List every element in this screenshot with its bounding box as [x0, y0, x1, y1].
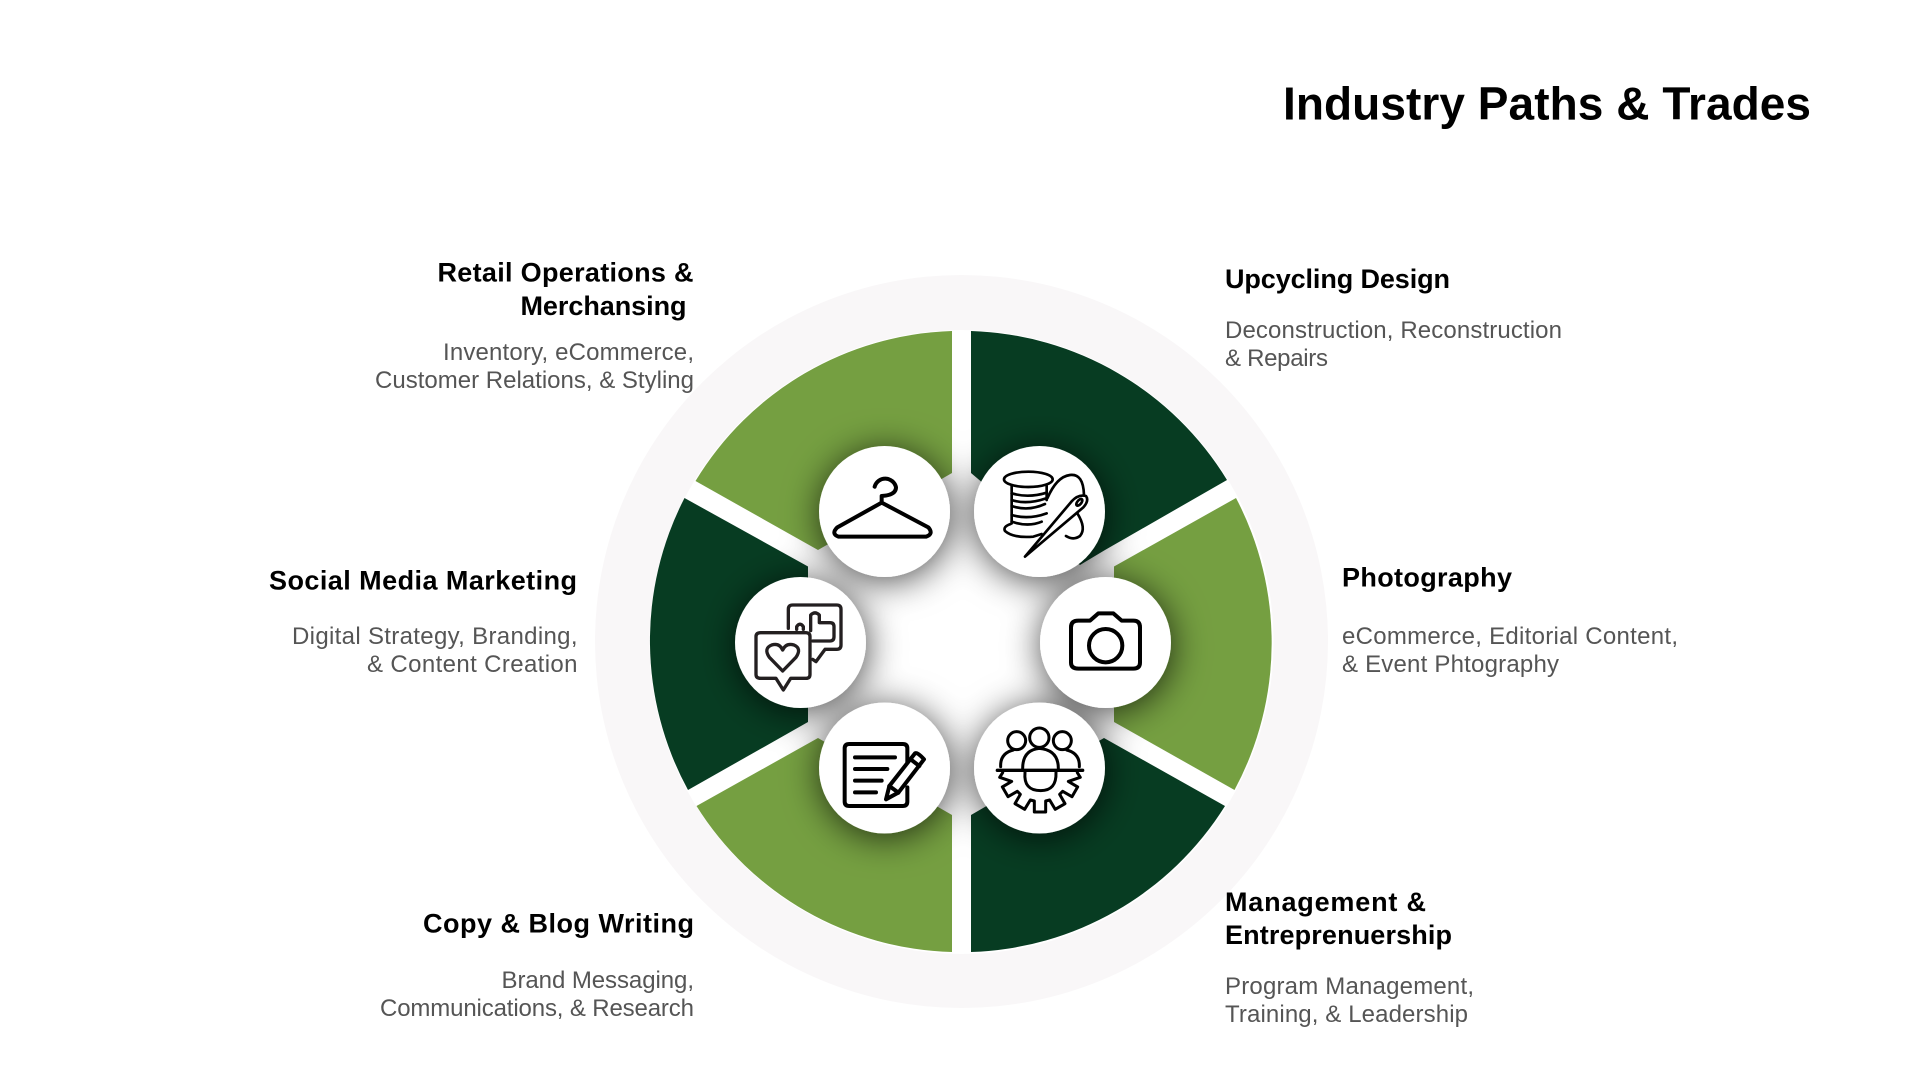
description: Deconstruction, Reconstruction	[1225, 317, 1562, 344]
label: social media marketing	[269, 566, 578, 678]
segment: photography	[1114, 498, 1272, 790]
heading: Copy & Blog Writing	[423, 909, 694, 939]
heading: Upcycling Design	[1225, 264, 1450, 294]
segment: social media marketing	[650, 498, 808, 790]
label: photography: & Event Phtography	[1342, 651, 1559, 678]
label: retail operations	[375, 257, 694, 394]
label: photography	[1342, 562, 1678, 678]
circle: spool	[974, 446, 1105, 577]
label: upcycling design	[1225, 264, 1562, 372]
description: Inventory, eCommerce,	[443, 339, 694, 366]
segment: copy and blog writing	[696, 738, 952, 952]
wheel background	[650, 330, 1274, 954]
label: social media marketing: & Content Creation	[367, 651, 578, 678]
icon: camera	[1071, 613, 1140, 669]
heading: Photography	[1342, 562, 1512, 592]
description: eCommerce, Editorial Content,	[1342, 623, 1678, 650]
segment: upcycling design	[971, 331, 1227, 565]
circle: camera	[1040, 577, 1171, 708]
heading: Retail Operations &	[438, 257, 694, 287]
label: retail operations: Customer Relations, & Styling	[375, 367, 694, 394]
description: Brand Messaging,	[502, 967, 694, 994]
segment: retail operations and merchandising	[696, 331, 952, 550]
label: copy and blog writing: Communications, & Research	[380, 995, 694, 1022]
title: Industry Paths & Trades	[1283, 78, 1811, 130]
wheel segments	[650, 331, 1272, 952]
icon: social likes	[756, 605, 841, 690]
label: management and entrepreneurship: Entreprenuership	[1225, 920, 1452, 950]
circle: hanger	[819, 446, 950, 577]
icon: hanger	[834, 479, 931, 537]
circle: team gear	[974, 702, 1105, 834]
heading: Social Media Marketing	[269, 566, 577, 596]
circle: notes	[819, 702, 950, 834]
label: copy and blog writing	[380, 909, 694, 1022]
label: upcycling design: & Repairs	[1225, 345, 1328, 372]
circle: social	[735, 577, 866, 708]
icon: notes and pencil	[845, 744, 924, 806]
icon: thread spool and needle	[1004, 472, 1087, 557]
label: management and entrepreneurship	[1225, 887, 1474, 1028]
heading: Management &	[1225, 887, 1426, 917]
label: retail operations: Merchansing	[520, 291, 686, 321]
icon circles	[735, 446, 1171, 834]
outer ring	[595, 275, 1328, 1008]
segment: management and entrepreneurship	[971, 738, 1225, 952]
icon: team and gear	[997, 728, 1083, 812]
label: management and entrepreneurship: Training, & Leadership	[1225, 1001, 1468, 1028]
description: Digital Strategy, Branding,	[292, 623, 578, 650]
description: Program Management,	[1225, 973, 1474, 1000]
